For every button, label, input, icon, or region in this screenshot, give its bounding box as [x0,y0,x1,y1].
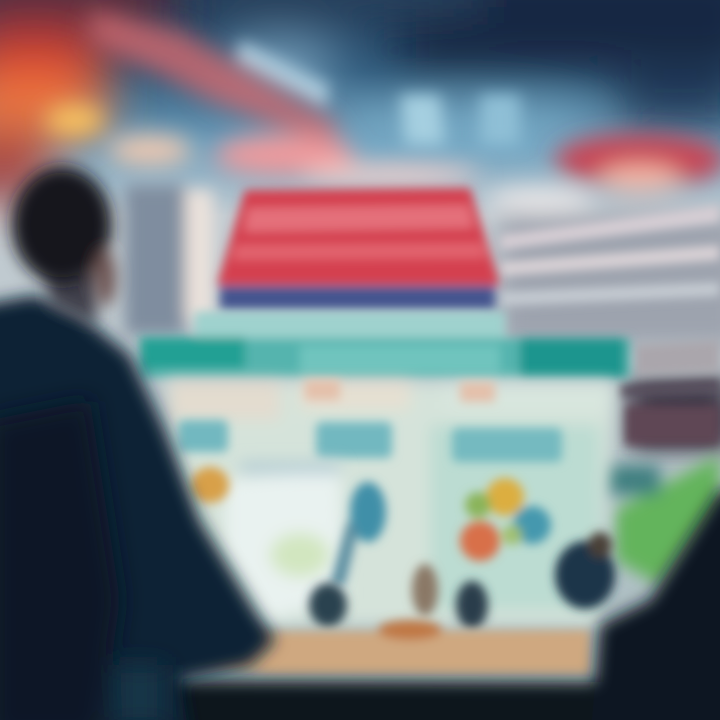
red banner sign [217,188,500,310]
colourful pie icon [460,478,551,561]
person silhouette [0,167,275,720]
person head [12,167,116,306]
green pitch [600,455,720,585]
person neck [45,265,100,325]
warm highlights and pink streaks [45,10,480,185]
left pillar behind screen [125,185,213,335]
chess-like dark pieces on table [309,532,615,629]
infographic panel [165,380,615,625]
stadium stands, right side [485,134,720,450]
bottom dark foreground [120,490,720,720]
person shading [0,400,165,720]
blue figure icon [330,482,386,585]
person body [0,295,275,720]
small orange icon [191,467,229,503]
wooden table [140,620,590,674]
tablet and chart [225,462,345,620]
red and orange glow top left [0,0,170,205]
panel label pills [178,380,562,462]
teal header band [140,312,630,378]
